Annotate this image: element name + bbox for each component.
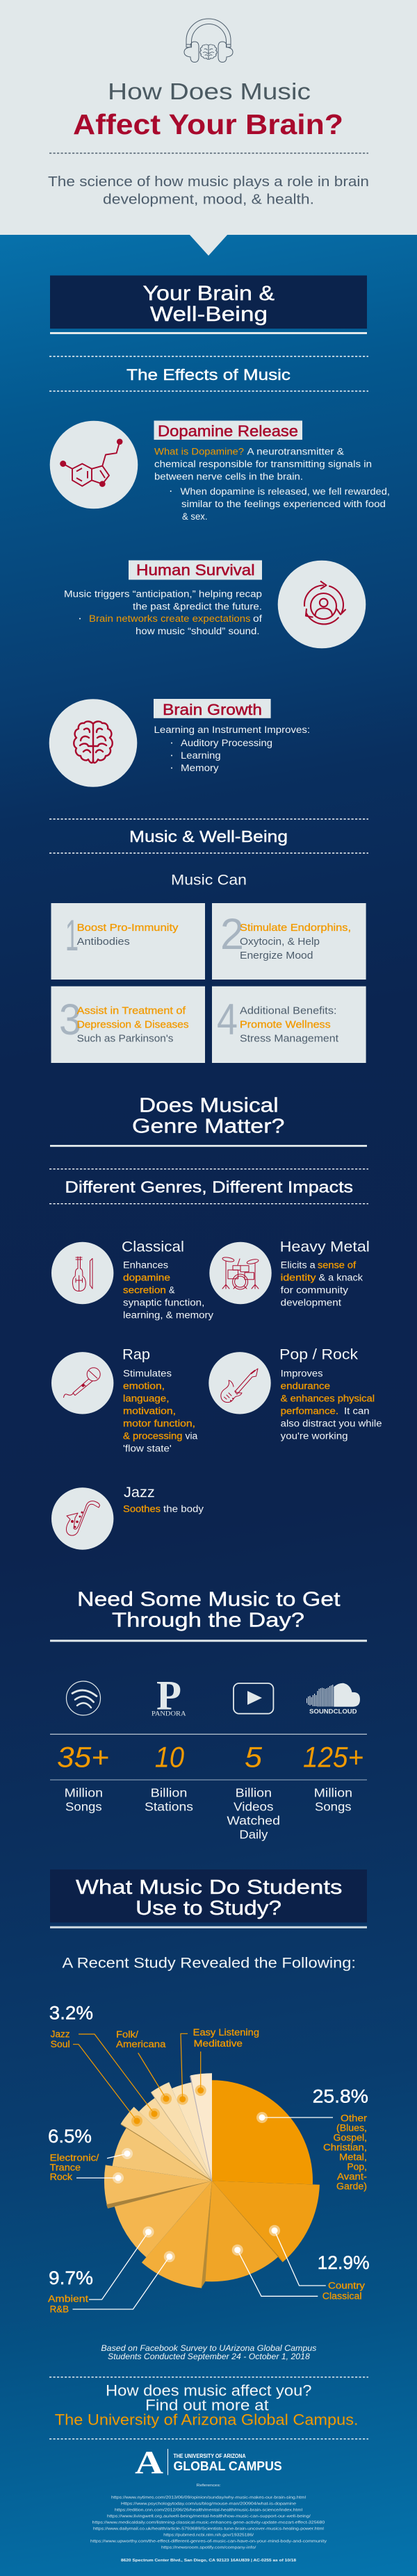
callout: 25.8 percent other: Garde) <box>336 2181 367 2191</box>
section heading: Need Some Music: Through the Day? <box>112 1610 304 1632</box>
heading: The Effects of Music: The Effects of Music <box>126 366 291 383</box>
card 2: Energize Mood <box>240 950 313 961</box>
text: & processing <box>123 1431 182 1442</box>
subtitle: development, mood, & health. <box>103 192 314 207</box>
call to action <box>55 2381 359 2428</box>
card 3 <box>51 986 205 1063</box>
survey note: Students Conducted September 24 - October 1, 2018 <box>108 2353 310 2361</box>
panel: human survival <box>64 560 366 648</box>
callout: 25.8 percent other: Gospel, <box>334 2132 367 2142</box>
callout: 12.9 percent country and classical: Country <box>328 2281 365 2291</box>
stat numbers <box>57 1740 363 1773</box>
text block <box>64 589 262 636</box>
text: Soothes <box>123 1504 161 1514</box>
subheading: Music Can: Music Can <box>171 873 247 889</box>
text block: When dopamine is released, we fell rewarded, <box>181 486 390 497</box>
icon: headphones with brain <box>184 19 233 63</box>
text block: Music triggers “anticipation,” helping recap <box>64 589 262 600</box>
text: & <box>169 1285 175 1295</box>
pie chart <box>104 2073 320 2288</box>
stat labels: Billion <box>236 1786 272 1800</box>
survey note <box>101 2345 317 2361</box>
icon: soundcloud: SOUNDCLOUD <box>309 1708 357 1715</box>
stat labels: Stations <box>145 1800 193 1814</box>
panel: brain growth <box>49 699 310 787</box>
card 4 <box>212 986 366 1063</box>
text: emotion, <box>123 1381 165 1392</box>
header panel <box>0 0 417 235</box>
text: & enhances physical <box>281 1394 375 1404</box>
subtitle <box>48 174 369 207</box>
leader lines and orange labels: 3.2 percent genres: Jazz <box>51 2029 70 2040</box>
callout: 12.9 percent country and classical <box>232 2225 370 2301</box>
text block: chemical responsible for transmitting signals in <box>154 459 372 470</box>
text block: Brain networks create expectations <box>89 613 251 624</box>
call to action: Find out more at <box>145 2396 268 2413</box>
references: https://www.dailymail.co.uk/health/article-5793689/Scientists-tune-brain-uncover-musics-healing-power.html <box>93 2527 324 2532</box>
references: https://www.medicaldaily.com/listening-classical-music-enhances-gene-activity-update-mozart-effect-325680 <box>92 2521 325 2525</box>
text block: & sex. <box>182 511 207 522</box>
text: development <box>281 1297 341 1307</box>
leader lines and orange labels: 3.2 percent genres <box>49 2003 259 2127</box>
text: perfomance. <box>281 1406 338 1417</box>
panel: rap <box>51 1347 198 1454</box>
card 2: Oxytocin, & Help <box>240 936 320 948</box>
text block <box>154 446 390 522</box>
card 3: 3 <box>59 996 81 1044</box>
icon: youtube <box>234 1683 273 1714</box>
header pointer arrow <box>189 234 228 256</box>
section heading: Your Brain and Well-Being: Your Brain & <box>143 282 275 305</box>
section heading: What Music Do Students Use to Study: Use to Study? <box>136 1897 281 1919</box>
icon: pandora: PANDORA <box>152 1711 186 1718</box>
card 1: Antibodies <box>77 936 130 948</box>
logo: University of Arizona Global Campus <box>135 2445 282 2481</box>
text block: Memory <box>181 763 219 773</box>
text: Improves <box>281 1369 323 1379</box>
text block: What is Dopamine? <box>154 446 244 457</box>
text: synaptic function, <box>123 1297 204 1307</box>
stat labels: Million <box>314 1786 352 1800</box>
address line: 8620 Spectrum Center Blvd., San Diego, CA 92123 16AU839 | AC-0255 as of 10/18 <box>121 2559 297 2563</box>
card 3: Depression & Diseases <box>77 1019 189 1030</box>
section heading: Does Musical Genre Matter <box>50 1095 367 1147</box>
text block: Auditory Processing <box>181 738 272 748</box>
heading: Heavy Metal <box>280 1239 370 1255</box>
leader lines and orange labels: 3.2 percent genres: Easy Listening <box>193 2027 259 2038</box>
leader lines and orange labels: 3.2 percent genres: Meditative <box>194 2038 243 2049</box>
callout: 12.9 percent country and classical: Classical <box>322 2290 361 2301</box>
text block: between nerve cells in the brain. <box>154 471 303 482</box>
text block: how music “should” sound. <box>136 626 260 636</box>
callout: 6.5 percent electronic and rock: Rock <box>50 2172 72 2182</box>
icon: person in cycle arrows <box>278 561 366 648</box>
logo: University of Arizona Global Campus: GLOBAL CAMPUS <box>174 2459 282 2473</box>
leader lines and orange labels: 3.2 percent genres: 3.2% <box>49 2003 93 2024</box>
callout: 9.7 percent ambient and r&b: R&B <box>50 2304 69 2314</box>
card 4: Stress Management <box>240 1033 338 1044</box>
icon: spotify <box>67 1681 100 1715</box>
leader lines and orange labels: 3.2 percent genres: Americana <box>116 2039 166 2049</box>
references: https://edition.cnn.com/2012/06/26/health/mental-health/music-brain-science/index.html <box>115 2509 302 2513</box>
callout: 25.8 percent other <box>256 2086 368 2191</box>
text: 'flow state' <box>123 1444 172 1454</box>
text: identity <box>281 1272 316 1282</box>
callout: 6.5 percent electronic and rock: Electronic/ <box>50 2153 99 2163</box>
references: References: <box>197 2484 221 2488</box>
section heading: Does Musical Genre Matter: Does Musical <box>139 1095 279 1117</box>
text block: Learning an Instrument Improves: <box>154 725 310 735</box>
callout: 12.9 percent country and classical: 12.9% <box>318 2252 370 2273</box>
card 1: 1 <box>65 911 79 960</box>
references: https://www.livingwell.org.au/well-being/mental-health/how-music-can-support-our-well-being/ <box>107 2515 311 2519</box>
panel: classical <box>51 1239 213 1320</box>
panel: heavy metal <box>209 1239 370 1307</box>
callout: 25.8 percent other: Pop, <box>347 2161 367 2172</box>
callout: 25.8 percent other: (Blues, <box>336 2122 367 2133</box>
text: motivation, <box>123 1406 176 1417</box>
survey note: Based on Facebook Survey to UArizona Global Campus <box>101 2345 317 2353</box>
text: endurance <box>281 1381 330 1392</box>
card 4: Promote Wellness <box>240 1019 331 1030</box>
panel: pop rock <box>208 1347 382 1442</box>
text: Elicits a <box>281 1260 316 1270</box>
icon: brain <box>49 699 137 787</box>
references <box>90 2484 327 2550</box>
card 3: Assist in Treatment of <box>77 1005 186 1016</box>
callout: 9.7 percent ambient and r&b: 9.7% <box>49 2268 93 2288</box>
text: the body <box>163 1504 204 1514</box>
callout: 25.8 percent other: 25.8% <box>313 2086 368 2107</box>
stat labels: Videos <box>234 1800 274 1814</box>
logo: University of Arizona Global Campus: THE UNIVERSITY OF ARIZONA <box>174 2452 246 2459</box>
subtitle: The science of how music plays a role in brain <box>48 174 369 190</box>
stat labels: Songs <box>65 1800 102 1814</box>
card 3: Such as Parkinson's <box>77 1033 173 1044</box>
section heading: Need Some Music: Need Some Music to Get <box>77 1589 341 1611</box>
text: learning, & memory <box>123 1310 213 1320</box>
text block: the past &predict the future. <box>133 602 262 612</box>
card 1: Boost Pro-Immunity <box>77 923 179 934</box>
text <box>281 1369 382 1442</box>
heading: Music and Well-Being: Music & Well-Being <box>129 827 288 845</box>
heading tag: Human Survival <box>136 561 255 579</box>
stat numbers: 35+ <box>57 1740 109 1773</box>
text: Stimulates <box>123 1369 172 1379</box>
stat labels: Million <box>65 1786 103 1800</box>
text block <box>154 725 310 773</box>
callout: 6.5 percent electronic and rock: 6.5% <box>48 2126 92 2147</box>
logo: University of Arizona Global Campus: A <box>135 2445 163 2481</box>
text: language, <box>123 1394 169 1404</box>
references: Https://www.psychologytoday.com/us/blog/mouse-man/200904/what-is-dopamine <box>121 2502 296 2507</box>
heading: Classical <box>122 1239 184 1255</box>
text block: Learning <box>181 750 221 761</box>
heading: Rap <box>122 1347 150 1363</box>
stat labels: Watched <box>227 1814 280 1828</box>
heading: Jazz <box>124 1485 155 1501</box>
callout: 9.7 percent ambient and r&b <box>48 2227 175 2314</box>
text: you're working <box>281 1431 348 1442</box>
callout: 25.8 percent other: Metal, <box>339 2152 367 2162</box>
heading tag: Brain Growth <box>163 701 262 718</box>
card 1 <box>51 903 205 980</box>
text block: A neurotransmitter & <box>247 446 344 457</box>
text: It can <box>344 1406 370 1417</box>
icon: violin <box>51 1242 113 1304</box>
leader lines and orange labels: 3.2 percent genres: Soul <box>51 2039 70 2049</box>
panel: jazz <box>51 1485 204 1550</box>
section heading: Your Brain and Well-Being: Well-Being <box>150 303 268 326</box>
text: Enhances <box>123 1260 168 1270</box>
callout: 25.8 percent other: Avant- <box>337 2171 367 2181</box>
stat labels <box>65 1786 352 1842</box>
callout: 25.8 percent other: Christian, <box>323 2142 367 2152</box>
subheading: study intro: A Recent Study Revealed the Following: <box>63 1956 356 1972</box>
stat labels: Billion <box>151 1786 187 1800</box>
text: secretion <box>123 1285 166 1295</box>
icon: drum kit <box>209 1242 272 1304</box>
text: sense of <box>318 1260 356 1270</box>
heading: Pop / Rock <box>279 1347 359 1363</box>
icon: saxophone <box>51 1487 113 1550</box>
stat numbers: 125+ <box>303 1740 363 1773</box>
icon: dopamine molecule <box>50 421 138 509</box>
callout: 9.7 percent ambient and r&b: Ambient <box>48 2294 88 2304</box>
callout: 25.8 percent other: Other <box>341 2113 368 2123</box>
text: & a knack <box>318 1272 363 1282</box>
call to action: The University of Arizona Global Campus. <box>55 2411 359 2428</box>
title: How Does Music <box>108 79 311 105</box>
text <box>281 1260 363 1307</box>
callout: 6.5 percent electronic and rock <box>48 2126 133 2183</box>
heading tag: Dopamine Release <box>158 422 298 440</box>
references: https://pubmed.ncbi.nlm.nih.gov/19325186/ <box>163 2534 254 2538</box>
references: https://www.upworthy.com/the-effect-different-genres-of-music-can-have-on-your-mind-body-and-community <box>90 2540 327 2544</box>
icon: soundcloud <box>306 1683 360 1715</box>
icon: microphone <box>51 1352 113 1414</box>
card 2 <box>212 903 366 980</box>
heading: Different Genres, Different Impacts: Different Genres, Different Impacts <box>65 1178 353 1196</box>
stat numbers: 5 <box>245 1740 263 1773</box>
section heading: Need Some Music <box>50 1589 367 1642</box>
section heading: Your Brain and Well-Being <box>50 275 367 334</box>
card 2: Stimulate Endorphins, <box>240 923 351 934</box>
stat numbers: 10 <box>155 1740 185 1773</box>
card 2: 2 <box>220 910 244 959</box>
card 4: Additional Benefits: <box>240 1005 336 1016</box>
panel: dopamine release <box>50 421 390 522</box>
icon: electric guitar <box>208 1352 271 1414</box>
text: via <box>185 1431 198 1442</box>
heading tag <box>154 699 271 718</box>
text <box>123 1260 213 1320</box>
callout: 6.5 percent electronic and rock: Trance <box>50 2163 81 2173</box>
text: also distract you while <box>281 1419 382 1429</box>
text: motor function, <box>123 1419 195 1429</box>
text block: similar to the feelings experienced with food <box>181 499 386 509</box>
text: dopamine <box>123 1272 170 1282</box>
stat labels: Songs <box>315 1800 352 1814</box>
title: Affect Your Brain? <box>73 108 343 140</box>
call to action: How does music affect you? <box>106 2381 311 2399</box>
section heading: What Music Do Students Use to Study: What Music Do Students <box>76 1876 343 1899</box>
section heading: What Music Do Students Use to Study <box>50 1869 367 1929</box>
references: https://www.nytimes.com/2013/06/09/opinion/sunday/why-music-makes-our-brain-sing.html <box>111 2496 306 2500</box>
section heading: Does Musical Genre Matter: Genre Matter? <box>132 1116 285 1138</box>
stat labels: Daily <box>239 1828 268 1842</box>
text <box>123 1504 204 1514</box>
text <box>123 1369 198 1454</box>
icon: pandora: P <box>156 1673 181 1719</box>
text: for community <box>281 1285 348 1295</box>
references: https://newsroom.spotify.com/company-info/ <box>161 2546 256 2550</box>
text block: of <box>253 613 262 624</box>
leader lines and orange labels: 3.2 percent genres: Folk/ <box>116 2029 138 2040</box>
card 4: 4 <box>217 996 238 1044</box>
title <box>73 79 343 140</box>
